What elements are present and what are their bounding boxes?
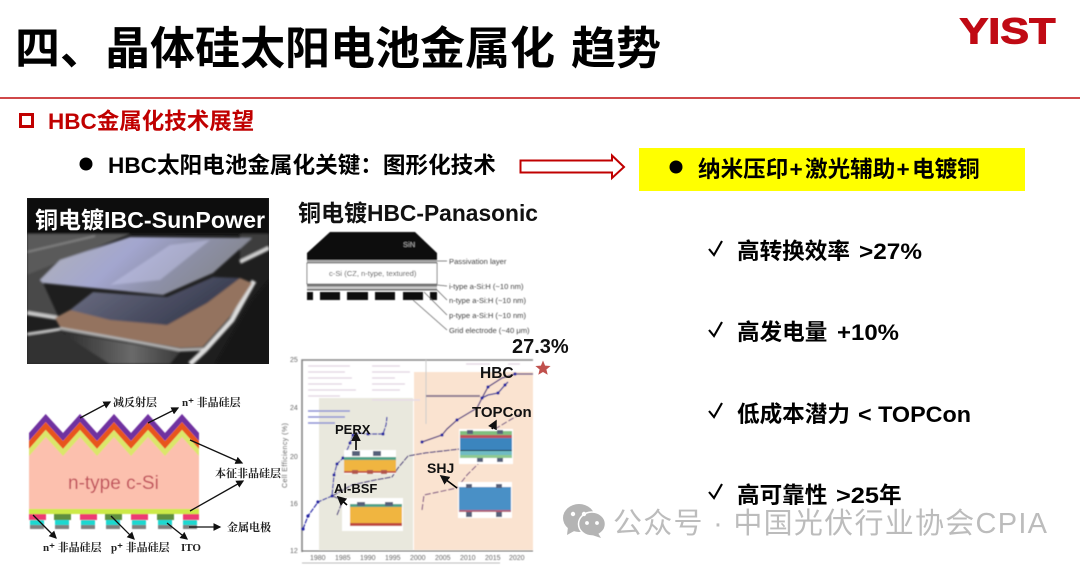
icon: record star [535,360,551,375]
doped blocks [29,514,199,520]
benefit: efficiency [709,239,922,264]
series labels: TOPCon [472,404,532,421]
x axis labels: 2000 [410,555,426,562]
benefit: yield: +10% [837,320,899,345]
intrinsic layer [29,430,199,456]
title: 趋势 [571,23,661,74]
diagram labels: 本征非晶硅层 [215,466,282,480]
benefit: yield [709,320,899,345]
electrodes [307,292,437,300]
panel: Panasonic cell structure: SiN [403,240,415,249]
x axis labels: 1985 [335,555,351,562]
x axis labels: 2015 [485,555,501,562]
legend traces [308,364,520,400]
diagram labels: n⁺ 非晶硅层 [182,395,242,409]
efficiency traces [303,417,387,529]
leader lines [413,261,447,330]
diagram labels: n⁺ 非晶硅层 [43,540,103,554]
diagram labels: ITO [181,542,201,554]
y axis labels: 20 [290,454,298,461]
panel: Panasonic cell structure: n-type a-Si:H (~10 nm) [449,296,526,305]
arrow [520,156,624,178]
era bands [319,398,413,550]
silicon label: n-type c-Si [68,473,159,494]
data markers [301,372,517,531]
x axis labels: 1995 [385,555,401,562]
y axis labels: 12 [290,548,298,555]
silicon layer [307,263,437,284]
heading: Panasonic: HBC-Panasonic [367,200,538,226]
y axis labels: Cell Efficiency (%) [282,423,289,488]
orange layer [29,422,199,449]
x axis labels: 1980 [310,555,326,562]
key point text: HBC太阳电池金属化关键：图形化技术 [108,152,496,178]
panel: Panasonic cell structure [307,232,530,335]
diagram labels [43,395,282,554]
chart arrows [338,421,496,505]
series labels: HBC [480,365,514,382]
purple anti-reflection layer [29,414,199,441]
icon: round bullet [670,160,682,174]
inset: Al-BSF structure [342,498,403,531]
y axis labels: 25 [290,357,298,364]
silicon body [29,430,199,509]
callout text: 纳米压印 [698,157,788,182]
inset: SHJ structure [458,482,512,518]
key point line [80,152,496,178]
title: 四、晶体硅太阳电池金属化 [15,23,555,74]
header divider [0,97,1080,99]
x axis labels: 2020 [509,555,525,562]
callout: yellow highlight [639,148,1025,191]
benefit: efficiency: >27% [859,239,922,264]
x axis labels: 2005 [435,555,451,562]
y axis labels: 16 [290,501,298,508]
callout text: + [896,157,910,182]
chart: cell efficiency timeline [282,357,551,563]
photo label: IBC-SunPower [104,207,265,233]
heading: Panasonic: 铜电镀 [298,200,367,226]
SiN layer [307,232,437,260]
chart frame [302,360,533,552]
heading text: HBC金属化技术展望 [48,108,254,134]
panel: Panasonic cell structure: i-type a-Si:H (~10 nm) [449,282,524,291]
callout text: + [790,157,803,182]
section heading [20,108,254,134]
benefit: cost [709,402,971,427]
series labels [334,365,532,496]
diagram labels: 减反射层 [113,395,158,409]
diagram labels: 金属电极 [227,520,271,534]
benefit: yield: 高发电量 [737,320,827,345]
panel: Panasonic cell structure: p-type a-Si:H (~10 nm) [449,311,526,320]
y axis labels [282,357,298,555]
benefit: reliability: >25 [836,483,879,508]
diagram arrows [33,402,243,539]
diagram labels: p⁺ 非晶硅层 [111,540,171,554]
photo label: 铜电镀 [35,207,104,233]
watermark [563,504,1048,540]
benefit: reliability: 年 [879,483,902,508]
panel: HBC cross-section diagram [29,395,282,554]
x axis labels: 1990 [360,555,376,562]
layer labels: Passivation layer [449,257,507,266]
panel: Panasonic cell structure: Grid electrode (~40 μm) [449,326,530,335]
icon: square bullet [20,114,32,126]
benefit: reliability: 高可靠性 [737,483,827,508]
series labels: SHJ [427,460,454,476]
benefit: cost: < TOPCon [858,402,971,427]
efficiency value: 27.3% [512,336,569,358]
watermark text: 公众号 · 中国光伏行业协会CPIA [613,507,1048,540]
benefit list [709,239,971,508]
y axis labels: 24 [290,405,298,412]
inset: TOPCon structure [459,429,513,464]
x axis labels [310,555,525,562]
benefit: cost: 低成本潜力 [737,402,850,427]
panel: SunPower photo [27,198,269,364]
callout text: 电镀铜 [912,157,980,182]
metal electrodes [30,525,197,529]
callout text: 激光辅助 [805,156,895,182]
ITO blocks [30,520,197,525]
logo: YIST: YIST [960,10,1056,52]
benefit: efficiency: 高转换效率 [737,239,850,264]
inset: PERX structure [344,450,396,474]
series labels: Al-BSF [334,481,377,496]
x axis labels: 2010 [460,555,476,562]
icon: round bullet [80,158,92,170]
series labels: PERX [335,422,371,437]
icon: chat bubbles [563,504,606,538]
panel: Panasonic cell structure: c-Si (CZ, n-type, textured) [329,269,417,278]
benefit: reliability [709,483,902,508]
